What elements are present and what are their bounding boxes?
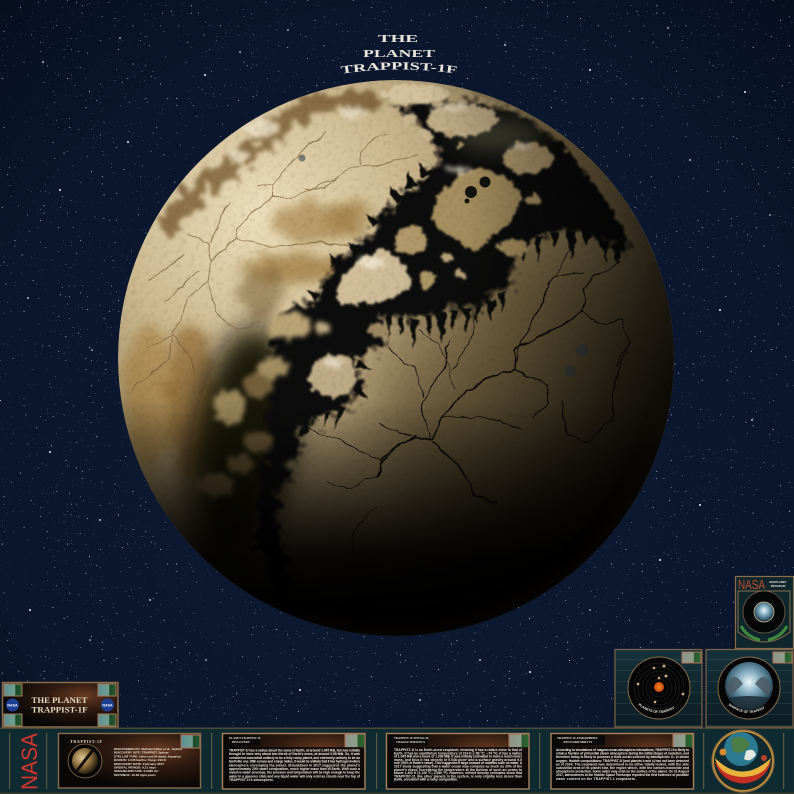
dark feather spikes along the sea shore	[284, 162, 621, 460]
badge laurels	[741, 626, 787, 640]
badge program label: PROGRAM	[771, 584, 786, 588]
thumbnail	[673, 734, 693, 748]
island highlights	[320, 105, 532, 366]
orbiting planets	[637, 664, 684, 703]
body text: thought to have only about two thirds of Earth's mass, at around 0.68 M⊕. So, it was	[229, 752, 360, 756]
land: brown streak band along upper rim	[165, 99, 378, 232]
title: The Planet Trappist-1F: THE	[378, 34, 418, 45]
orbit caption	[637, 704, 681, 713]
panel: overview	[58, 734, 200, 788]
title: The Planet Trappist-1F: PLANET	[363, 49, 435, 60]
caption: surface	[727, 704, 771, 713]
panel: atmosphere and habitability	[551, 734, 694, 789]
thumbnail	[682, 652, 701, 663]
heading: AND HABITABILITY	[563, 740, 593, 744]
overview facts: DISCOVERY SITE: TRAPPIST, Spitzer	[114, 751, 169, 755]
land: olive tone lower right	[346, 234, 627, 497]
overview facts: ORBITAL PERIOD: 9.21 days	[114, 766, 156, 770]
lower-left dim shadow field behind lumps	[176, 319, 308, 571]
body text: According to simulations of magma ocean-atmosphere interactions, TRAPPIST-1f is likely to	[556, 748, 689, 752]
system orbit diagram	[628, 657, 690, 719]
panel: surface view	[705, 648, 794, 728]
surface cracks	[130, 130, 418, 400]
mission emblem	[712, 730, 774, 792]
title card	[2, 682, 118, 727]
card heading: THE PLANET	[32, 695, 88, 705]
thumbnail	[345, 734, 365, 748]
body text: TRAPPIST-1f, like other planets in the system, is only slightly less dense than	[394, 774, 522, 778]
body text: 2017, astronomers at the Hubble Space Telescope reported the first evidence of possible	[556, 773, 689, 777]
sea sheen	[456, 119, 544, 151]
heading	[390, 736, 429, 746]
body text: Earth, consistent with a rocky composition.	[394, 778, 458, 782]
overview facts: RADIUS: 1.045 Earths; Temp: 214 K	[114, 758, 167, 762]
body text: water content on the TRAPPIST-1 exoplanets.	[555, 777, 636, 781]
badge dark disc	[743, 591, 785, 633]
badge planet vignette	[754, 602, 774, 622]
star Trappist-1	[654, 682, 664, 692]
sea fringe	[267, 94, 635, 526]
panel: planets of Trappist	[614, 648, 703, 728]
panel: surface view: SURFACE OF TRAPPIST	[728, 704, 764, 713]
card heading: TRAPPIST-1F	[32, 704, 88, 714]
body text: as of 2024. The exoplanet was determined to be either tidally locked, with the side	[556, 762, 689, 766]
body text: planet's mass, increasing the temperature at the bottom of such an ocean to	[394, 768, 522, 772]
body text: TRAPPIST-1f's atmosphere.	[229, 778, 274, 782]
rim glow lower right	[300, 400, 670, 636]
heading	[226, 736, 261, 746]
heading: PLANET TRAPPIST-1F	[229, 736, 261, 740]
body text: approximately 20% water composition, much higher mass than of Earth. With such a	[229, 767, 360, 771]
craters	[464, 176, 490, 204]
badge shield ring	[738, 591, 790, 642]
overview facts: DISCOVERED BY: Michaël Gillon et al., Spitzer	[114, 747, 183, 751]
body text: of 1.045 R⊕ and a mass of 1.039 M⊕. It was initially estimated to have a much lower	[394, 755, 523, 759]
body text: therefore today is likely to possess a thick ocean covered by atmospheric O₂ in steam	[556, 755, 689, 759]
heading: TRAPPIST-1F PHYSICAL	[394, 736, 429, 740]
body text: oxygen. Hubble compositions: TRAPPIST-1f (and planets b and c) has not been detected	[556, 759, 689, 763]
heading	[553, 736, 605, 746]
caption: planets of Trappist: PLANETS OF TRAPPIST	[638, 703, 674, 713]
body text: atmospheric protection. Some water may exist on the surface of the planet. On 31 August	[556, 770, 690, 774]
body text: TRAPPIST-1f is an Earth-sized exoplanet, meaning it has a radius close to that of	[394, 748, 523, 752]
overview mini planet	[68, 744, 102, 778]
surface vignette	[718, 657, 780, 719]
body text: TRAPPIST-1f has a radius about the same of Earth, at around 1.045 R⊕, but was initially	[229, 748, 360, 752]
title: The Planet Trappist-1F	[340, 34, 457, 74]
NASA worm logotype: NASA	[17, 733, 42, 790]
bottom shadow	[124, 410, 649, 636]
overview arc title: TRAPPIST-1F	[70, 739, 103, 744]
badge program label: EXOPLANET	[769, 580, 787, 584]
heading: TRAPPIST-1F ATMOSPHERE	[557, 736, 597, 740]
body text: retain a fraction of primordial steam atmosphere during the initial stages of evolution, and	[556, 752, 689, 756]
NASA emblem left: NASA	[7, 704, 18, 708]
body text	[553, 747, 692, 786]
overview facts: DISTANCE: 40.66 light-years	[114, 773, 156, 777]
body text: above 1,400 K (1,130 °C; 2,060 °F). However, refined density estimates show that	[394, 771, 523, 775]
NASA emblem right: NASA	[102, 704, 113, 708]
heading: CHARACTERISTICS	[396, 740, 426, 744]
panel: physical characteristics	[386, 734, 529, 789]
heading: DISCOVERY	[232, 740, 251, 744]
land: pale patches on upper rim	[227, 107, 370, 162]
body text: m/s² (93% of Earth's value). This suggested a large amount of volatiles such as water. A	[394, 761, 523, 765]
title: The Planet Trappist-1F: TRAPPIST-1F	[340, 62, 457, 74]
body text	[390, 747, 528, 786]
land: warm brown regions	[124, 202, 374, 478]
exoplanet program badge	[736, 576, 794, 648]
planet Trappist-1F	[118, 80, 674, 636]
islands	[309, 84, 553, 398]
thumbnail	[181, 735, 200, 748]
body text: Earth-like one. With a mass and a large radius, it would be unlikely that it has hydrogen-helium	[229, 760, 360, 764]
dark sea band	[255, 104, 635, 620]
terminator shadow	[118, 80, 674, 636]
panel: discovery	[222, 734, 365, 789]
overview facts: STELLAR TYPE: Ultra-cool M dwarf, Aquarius	[114, 754, 181, 758]
dim lumps lower left	[195, 312, 329, 497]
body text: water in a gaseous state and any liquid water will only exist as clouds near the top of	[228, 774, 361, 778]
thumbnail	[509, 734, 529, 748]
corner thumbnails	[4, 684, 116, 726]
impact marks	[298, 154, 588, 377]
land: rim strip upper right	[462, 88, 665, 262]
badge NASA logotype: NASA	[738, 577, 765, 592]
body text	[226, 747, 364, 786]
body text: Earth. It has an equilibrium temperature of 214 K (−59 °C; −74 °F). It has a radius	[394, 751, 522, 755]
body text: considered somewhat unlikely to be a fully rocky planet, and extremely unlikely to be an	[229, 756, 360, 760]
body text: atmosphere enveloping the planet. Simulations in 2017 suggested the planet's	[229, 763, 360, 767]
body text: massive water envelope, the pressure and temperature will be high enough to keep the	[229, 771, 360, 775]
body text: 2017 study suggesting that a water ocean may compose as much as 20% of the	[394, 764, 522, 768]
overview facts: SEMI-MAJOR AXIS: 0.0385 AU	[114, 769, 159, 773]
body text: mass, and thus it has density of 5.048 g/cm³ and a surface gravity around 9.5	[394, 758, 522, 762]
thumbnail	[773, 652, 792, 663]
surface texture	[120, 82, 533, 438]
bottom info strip	[0, 728, 794, 794]
overview facts: DISCOVERY DATE: February 2017	[114, 762, 164, 766]
body text: substellar area of its planet star, the region which, with the carbon-monoxide and	[556, 766, 689, 770]
